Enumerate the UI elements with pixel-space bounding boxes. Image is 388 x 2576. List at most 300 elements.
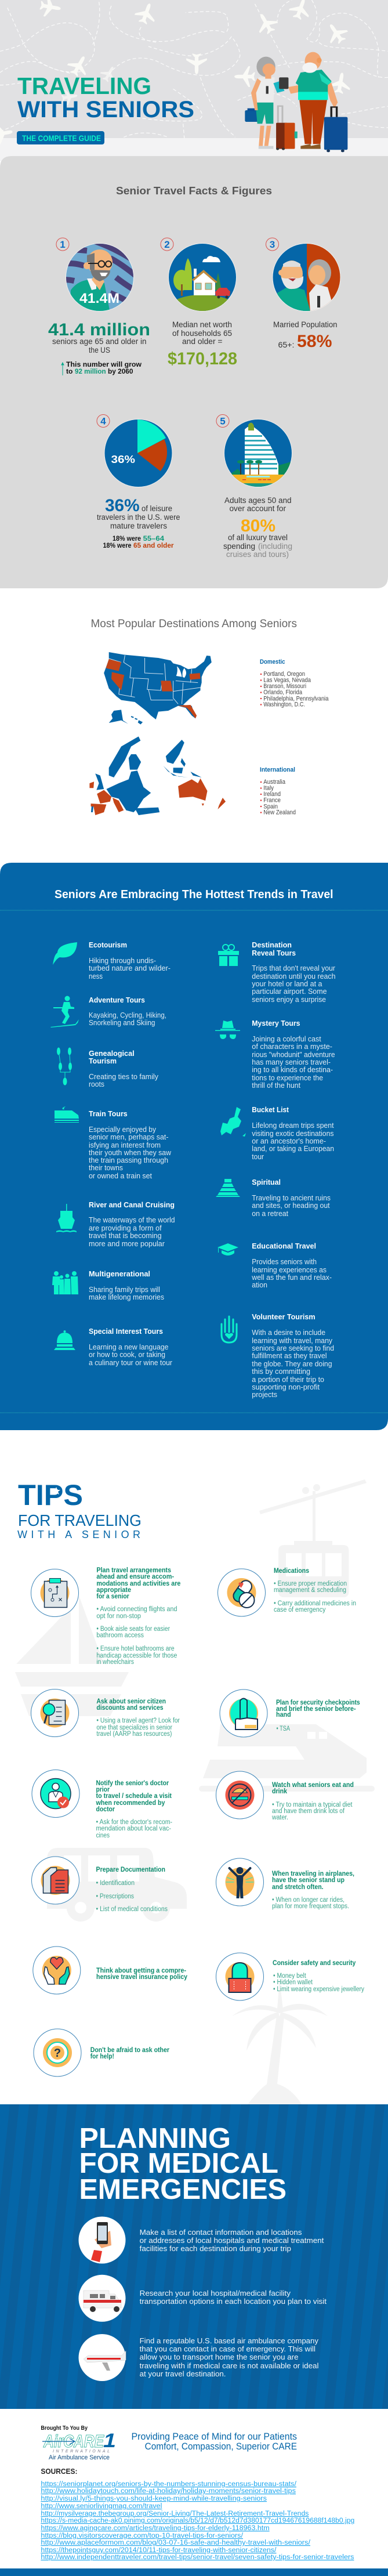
list: international destinations: Spain	[263, 803, 278, 810]
tip: eat and drink: drink	[272, 1788, 288, 1795]
trend: mystery tours: of characters in a myste-	[252, 1042, 332, 1051]
tip: stand and stretch: When traveling in airplanes,	[272, 1871, 354, 1877]
trend: train tours: their towns	[89, 1163, 123, 1172]
trend: mystery tours: rious "whodunit" adventure	[252, 1050, 335, 1059]
tip: notify doctor: mendation about local vac-	[96, 1825, 171, 1832]
fact 4 text: 18% were	[103, 542, 131, 549]
tip: documentation	[96, 1866, 168, 1913]
fact 3 text: 58%	[297, 332, 332, 351]
icon: graduation cap	[217, 1243, 238, 1256]
icon: detective hat and glasses	[215, 1021, 240, 1039]
fact 5 illustration: luxury hotel	[224, 419, 293, 488]
fact 2 badge	[161, 238, 173, 251]
icon: family	[52, 1271, 78, 1294]
trend: volunteer tourism: With a desire to include	[252, 1328, 325, 1337]
logo: AirCare1 International	[42, 2430, 116, 2461]
trend: ecotourism: Hiking through undis-	[89, 956, 156, 965]
trend: destination reveal: Reveal Tours	[252, 949, 296, 957]
tip: security checkpoints: and brief the senior before-	[276, 1706, 356, 1713]
trend: spiritual: and sites, or heading out	[252, 1201, 330, 1210]
trend: volunteer tourism: this by committing	[252, 1367, 310, 1376]
trend: educational travel: well as the fun and relax-	[251, 1273, 332, 1282]
list: domestic destinations: Branson, Missouri	[263, 683, 306, 690]
icon: ship	[56, 1204, 77, 1232]
sources list: http://www.holidaytouch.com/life-at-holiday/holiday-moments/senior-travel-tips	[41, 2488, 296, 2495]
sources list: https://s-media-cache-ak0.pinimg.com/originals/b5/12/d7/b512d7d380177cd19467619688f148b0.jpg	[41, 2517, 354, 2524]
trend: river cruising: travel that is becoming	[89, 1231, 162, 1240]
trend: destination reveal: particular airport. Some	[252, 987, 327, 996]
trend: train tours: the train passing through	[89, 1156, 168, 1164]
trend: spiritual: Spiritual	[252, 1178, 281, 1186]
tip: notify doctor: doctor	[96, 1806, 115, 1813]
heading: tips for traveling with a senior: TIPS	[18, 1479, 83, 1511]
tip icon: travel plan clipboard	[31, 1569, 79, 1616]
watermark: train	[199, 1724, 375, 1792]
tip: safety and security: Consider safety and security	[273, 1960, 356, 1967]
fact 2 text: of households 65	[172, 329, 232, 338]
tip: notify doctor: to travel / schedule a visit	[96, 1793, 172, 1800]
trend: multigenerational: Sharing family trips will	[89, 1285, 160, 1294]
trend: train tours	[89, 1110, 172, 1180]
trend: spiritual: Traveling to ancient ruins	[252, 1193, 331, 1202]
tip: stand and stretch: • When on longer car rides,	[272, 1897, 345, 1904]
fact 5 badge: 5	[220, 415, 226, 427]
tip: notify doctor: • Ask for the doctor's recom-	[96, 1819, 172, 1826]
trend: mystery tours: ing to all kinds of destina-	[252, 1065, 333, 1074]
emergency step 3 text: that you can contact in case of emergency. This will	[140, 2345, 316, 2353]
tip icon: doctor	[32, 1770, 79, 1817]
trend: bucket list: Bucket List	[252, 1106, 289, 1114]
tip: senior discounts: one that specializes in senior	[96, 1724, 172, 1731]
sources list: https://seniorplanet.org/seniors-by-the-numbers-stunning-census-bureau-stats/	[41, 2481, 297, 2488]
sources list: https://blog.visitorscoverage.com/top-10-travel-tips-for-seniors/	[41, 2532, 244, 2539]
fact 1 text	[48, 320, 150, 375]
tip: ask for help: Don't be afraid to ask other	[90, 2047, 169, 2054]
tip: eat and drink: water.	[271, 1814, 288, 1821]
tip: medications	[274, 1568, 356, 1613]
tip: documentation: Prepare Documentation	[96, 1866, 165, 1873]
trend: destination reveal	[252, 941, 336, 1004]
emergency step 2 text: Research your local hospital/medical facility	[140, 2289, 291, 2298]
list: domestic destinations	[260, 659, 329, 708]
emergency step 1 text: or addresses of local hospitals and medical treatment	[140, 2236, 324, 2245]
sources list: https://www.agingcare.com/articles/traveling-tips-for-elderly-118963.htm	[41, 2525, 270, 2532]
tip: documentation: • List of medical conditions	[96, 1906, 168, 1913]
tip: plan arrangements: • Book aisle seats for easier	[96, 1626, 170, 1633]
fact 2 illustration: house and car	[168, 243, 237, 312]
tip: plan arrangements: in wheelchairs	[96, 1659, 134, 1666]
heading: planning for medical emergencies: PLANNING	[79, 2123, 231, 2154]
sources heading: SOURCES:	[41, 2467, 78, 2476]
badge: the complete guide	[17, 131, 104, 144]
fact 1 text: seniors age 65 and older in	[52, 337, 146, 346]
title: TRAVELING	[17, 73, 151, 99]
fact 5 text: over account for	[230, 504, 286, 513]
trend: destination reveal: destination until you reach	[252, 972, 335, 981]
trend: adventure tours: Snorkeling and Skiing	[89, 1018, 155, 1027]
trend: volunteer tourism: projects	[252, 1390, 277, 1399]
icon: phone in hand	[79, 2216, 125, 2264]
trend: train tours: Especially enjoyed by	[89, 1125, 156, 1134]
tip: travel insurance: hensive travel insurance policy	[96, 1974, 188, 1981]
trend: bucket list: visiting exotic destinations	[252, 1129, 334, 1138]
tip icon: stretching person	[216, 1858, 263, 1906]
tip: plan arrangements: for a senior	[96, 1593, 129, 1600]
tip: security checkpoints: • TSA	[276, 1725, 290, 1732]
tip: plan arrangements: modations and activities are	[96, 1580, 180, 1587]
tip: medications: Medications	[274, 1568, 309, 1575]
trend: volunteer tourism	[252, 1313, 334, 1399]
heading: planning for medical emergencies	[79, 2123, 287, 2205]
emergency step 3 text	[140, 2336, 319, 2378]
fact 5 text: 80%	[241, 516, 275, 536]
title	[17, 73, 194, 122]
watermark: palm tree	[232, 1980, 328, 2104]
fact 4 text: mature travelers	[110, 522, 167, 530]
tip: plan arrangements	[96, 1567, 180, 1666]
tip: medications: • Ensure proper medication	[274, 1580, 347, 1587]
panel: hottest trends background	[0, 863, 388, 1430]
fact 4 text: 18% were	[113, 536, 141, 542]
logo: AirCare1 International: INTERNATIONAL	[53, 2450, 110, 2454]
tip icon: medication capsule	[218, 1569, 266, 1616]
icon: air ambulance plane	[79, 2334, 126, 2381]
footer bar	[0, 2568, 388, 2576]
trend: spiritual: on a retreat	[252, 1209, 288, 1218]
logo: AirCare1 International: AirCARE	[43, 2431, 104, 2451]
tip: notify doctor: cines	[96, 1832, 110, 1839]
trend: river cruising: River and Canal Cruising	[89, 1201, 175, 1209]
tip: plan arrangements: bathroom access	[96, 1632, 144, 1639]
trend: special interest tours	[89, 1327, 173, 1367]
tip: stand and stretch: and stretch often.	[272, 1884, 324, 1891]
icon: service bell	[54, 1330, 75, 1350]
trend: train tours: Train Tours	[89, 1110, 128, 1118]
trend: multigenerational: Multigenerational	[89, 1270, 150, 1278]
map: united states	[104, 652, 212, 724]
fact 4 text	[97, 496, 180, 549]
tip: safety and security	[273, 1960, 364, 1993]
trend: genealogical tourism: Tourism	[89, 1057, 117, 1065]
panel: planning for medical emergencies	[0, 2104, 388, 2409]
trend: volunteer tourism: Volunteer Tourism	[252, 1313, 316, 1321]
list: international destinations: Italy	[263, 785, 274, 792]
tip icon: question bubble: ?	[54, 2047, 61, 2060]
icon: train	[55, 1106, 79, 1123]
heading: hottest trends: Seniors Are Embracing The Hottest Trends in Travel	[55, 888, 333, 901]
tip: plan arrangements: • Avoid connecting flights and	[96, 1606, 177, 1613]
heading: most popular destinations: Most Popular Destinations Among Seniors	[90, 618, 297, 630]
trend: adventure tours: Kayaking, Cycling, Hiking,	[89, 1011, 166, 1019]
trend: mystery tours: Mystery Tours	[252, 1019, 300, 1027]
sources list: http://www.aplaceformom.com/blog/03-07-16-safe-and-healthy-travel-with-seniors/	[41, 2539, 311, 2546]
trend: train tours: or owned a train set	[89, 1171, 152, 1180]
list: domestic destinations: Washington, D.C.	[263, 701, 305, 708]
tip icon: documents	[31, 1857, 79, 1904]
tip icon: magnifier and discount form	[31, 1689, 79, 1737]
emergency step 1 text: facilities for each destination during your trip	[140, 2244, 291, 2253]
fact 5 text: of all luxury travel	[228, 533, 288, 542]
fact 4 pie chart	[104, 419, 173, 487]
heading: planning for medical emergencies: FOR MEDICAL	[79, 2148, 278, 2179]
tip icon: hands with heart	[33, 1947, 81, 1994]
fact 1 text: This number will grow	[66, 361, 142, 368]
fact 5 text	[223, 496, 292, 559]
tip: plan arrangements: appropriate	[96, 1587, 131, 1594]
tip: eat and drink: • Try to maintain a typical diet	[272, 1801, 353, 1808]
trend: mystery tours	[252, 1019, 335, 1090]
trend: bucket list: or an ancestor's home-	[252, 1137, 326, 1145]
trend: ecotourism: turbed nature and wilder-	[89, 964, 171, 972]
list: international destinations: New Zealand	[263, 809, 296, 816]
tip: eat and drink: Watch what seniors eat and	[272, 1782, 354, 1789]
trend: train tours: isfying an interest from	[89, 1141, 161, 1149]
trend: bucket list: tour	[252, 1152, 264, 1161]
emergency step 3 text: Find a reputable U.S. based air ambulance company	[140, 2336, 318, 2345]
trend: volunteer tourism: supporting non-profit	[252, 1383, 320, 1391]
tip: stand and stretch: plan for more frequent stops.	[272, 1903, 349, 1910]
fact 5 text: (including	[258, 542, 292, 551]
tip: senior discounts: Ask about senior citizen	[96, 1698, 166, 1705]
fact 1 badge	[56, 238, 69, 251]
list: domestic destinations: Portland, Oregon	[263, 671, 305, 678]
tip: security checkpoints: Plan for security checkpoints	[276, 1699, 360, 1706]
icon: family tree	[57, 1048, 72, 1085]
tip: safety and security: • Money belt	[273, 1973, 306, 1980]
tip: eat and drink: and have them drink lots of	[272, 1808, 345, 1815]
tip icon: security hand	[220, 1689, 267, 1737]
emergency step 2 text: transportation options in each location you plan to visit	[140, 2297, 327, 2306]
tip: notify doctor: prior	[96, 1786, 110, 1793]
list: domestic destinations: Orlando, Florida	[263, 689, 303, 696]
tip: notify doctor	[96, 1780, 172, 1839]
tip: plan arrangements: Plan travel arrangements	[96, 1567, 171, 1574]
emergency step 2 text	[140, 2289, 327, 2306]
watermark: bus	[47, 1848, 187, 1922]
fact 1 badge: 1	[60, 239, 66, 250]
trend: destination reveal: your hotel or land at a	[252, 979, 322, 988]
tip: plan arrangements: • Ensure hotel bathrooms are	[96, 1645, 175, 1652]
list: international destinations: International	[260, 766, 295, 773]
trend: multigenerational	[89, 1270, 164, 1301]
fact 4 text: 65 and older	[133, 542, 174, 549]
tagline: Comfort, Compassion, Superior CARE	[145, 2441, 297, 2452]
emergency step 1 text	[140, 2228, 324, 2253]
trend: destination reveal: Destination	[252, 941, 292, 949]
trend: adventure tours: Adventure Tours	[89, 996, 145, 1004]
trend: educational travel: ation	[252, 1280, 267, 1289]
tip: plan arrangements: handicap accessible for those	[96, 1652, 177, 1659]
trend: train tours: their youth when they saw	[89, 1148, 172, 1157]
fact 1 illustration: man with glasses	[66, 243, 134, 312]
trend: volunteer tourism: learning with travel, many	[252, 1336, 332, 1345]
sources list: http://www.seniorlivingmag.com/travel	[41, 2503, 162, 2510]
sources list: https://thepointsguy.com/2014/10/11-tips-for-traveling-with-senior-citizens/	[41, 2547, 277, 2554]
tip: medications: case of emergency	[274, 1607, 326, 1613]
fact 1 text: 92 million	[75, 368, 106, 375]
tip: medications: • Carry additional medicines in	[274, 1600, 356, 1607]
tip: stand and stretch: have the senior stand up	[272, 1877, 345, 1884]
list: international destinations	[260, 766, 296, 816]
trend: volunteer tourism: a portion of their trip to	[252, 1375, 324, 1384]
fact 3 text	[273, 320, 338, 351]
tip: safety and security: • Hidden wallet	[273, 1979, 313, 1986]
hero background	[0, 0, 388, 161]
fact 1 text: the US	[89, 346, 110, 354]
fact 2 badge: 2	[164, 239, 170, 250]
fact 4 text: 55–64	[143, 536, 165, 542]
trend: genealogical tourism: roots	[89, 1080, 104, 1088]
tip icon: question bubble	[34, 2029, 81, 2076]
trend: ecotourism	[89, 941, 171, 981]
emergency step 3 text: traveling with if medical care is not available or ideal	[140, 2361, 319, 2370]
tagline: Providing Peace of Mind for our Patients	[131, 2431, 297, 2442]
panel: senior travel facts background	[0, 156, 388, 588]
heading: senior travel facts: Senior Travel Facts & Figures	[116, 185, 272, 197]
fact 4 text: 36%	[105, 496, 140, 515]
icon: leaf	[53, 942, 77, 965]
fact 1 text: by 2060	[108, 368, 133, 375]
heading: tips for traveling with a senior: FOR TRAVELING	[18, 1511, 142, 1529]
trend: educational travel: learning experiences as	[252, 1265, 327, 1274]
watermark: sailboat	[15, 1595, 129, 1716]
fact 5 badge	[216, 414, 229, 427]
title: WITH SENIORS	[17, 97, 194, 122]
tip: ask for help: for help!	[90, 2053, 114, 2060]
trend: mystery tours: thrill of the hunt	[252, 1081, 300, 1090]
fact 1 text: 41.4 million	[48, 320, 150, 339]
icon: skier	[50, 996, 79, 1027]
logo: AirCare1 International: Air Ambulance Service	[49, 2454, 110, 2461]
heading: tips for traveling with a senior	[17, 1479, 142, 1540]
icon: gift	[218, 945, 239, 966]
trend: mystery tours: has many seniors travel-	[252, 1058, 331, 1066]
icon: pyramid	[216, 1179, 240, 1197]
emergency step 3 text: at your travel destination.	[140, 2369, 226, 2378]
fact 3 text: Married Population	[273, 320, 338, 329]
trend: bucket list: land, or taking a European	[252, 1144, 334, 1153]
fact 2 text: $170,128	[168, 349, 237, 368]
trend: spiritual	[252, 1178, 331, 1218]
list: international destinations: Australia	[263, 779, 286, 786]
trend: multigenerational: make lifelong memories	[89, 1293, 164, 1301]
trend: ecotourism: Ecotourism	[89, 941, 127, 949]
trend: volunteer tourism: the globe. They are doing	[252, 1359, 332, 1368]
trend: special interest tours: Special Interest Tours	[89, 1327, 163, 1336]
brought to you by: Brought To You By	[41, 2425, 88, 2432]
tip: security checkpoints: hand	[276, 1712, 291, 1718]
illustration: senior couple with luggage	[245, 52, 347, 152]
trend: adventure tours	[89, 996, 166, 1027]
tip: travel insurance: Think about getting a compre-	[96, 1967, 186, 1974]
tip: safety and security: • Limit wearing expensive jewellery	[273, 1986, 364, 1993]
trend: educational travel	[251, 1242, 332, 1289]
trend: destination reveal: Trips that don't reveal your	[252, 964, 336, 972]
fact 2 text: Median net worth	[172, 320, 232, 329]
trend: educational travel: Provides seniors with	[252, 1257, 317, 1266]
stat inside circle: 41.4M	[79, 291, 119, 306]
trend: river cruising: are providing a form of	[89, 1224, 162, 1232]
sources list: http://visual.ly/5-things-you-should-keep-mind-while-travelling-seniors	[41, 2495, 267, 2502]
tip: travel insurance	[96, 1967, 188, 1981]
list: international destinations: Ireland	[263, 791, 281, 798]
trend: destination reveal: seniors enjoy a surprise	[252, 995, 326, 1004]
fact 1 text: to	[66, 368, 72, 375]
sources list: http://www.independenttraveler.com/travel-tips/senior-travel/seven-safety-tips-for-senior-travelers	[41, 2554, 354, 2561]
tip: plan arrangements: opt for non-stop	[96, 1613, 141, 1620]
icon: ambulance	[79, 2275, 125, 2322]
fact 5 text: spending	[223, 542, 255, 551]
badge: the complete guide: THE COMPLETE GUIDE	[22, 133, 101, 143]
emergency step 3 text: allow you to transport home the senior you are	[140, 2353, 298, 2361]
trend: educational travel: Educational Travel	[252, 1242, 316, 1250]
trend: genealogical tourism: Creating ties to family	[89, 1072, 158, 1081]
fact 3 badge	[266, 238, 278, 251]
trend: river cruising: more and more popular	[89, 1239, 165, 1248]
trend: river cruising	[89, 1201, 175, 1248]
fact 3 badge: 3	[270, 239, 275, 250]
tagline	[131, 2431, 297, 2452]
list: domestic destinations: Philadelphia, Pennsylvania	[263, 695, 329, 702]
heading: planning for medical emergencies: EMERGENCIES	[79, 2174, 287, 2205]
fact 3 text: 65+:	[278, 341, 295, 349]
trend: volunteer tourism: seniors are seeking to find	[252, 1344, 334, 1352]
tip: eat and drink	[271, 1782, 354, 1821]
fact 4 pie chart: 36%	[111, 454, 135, 465]
trend: special interest tours: a culinary tour or wine tour	[89, 1358, 173, 1367]
sources list	[41, 2481, 354, 2561]
trend: train tours: senior men, perhaps sat-	[89, 1133, 168, 1141]
tip: documentation: • Identification	[96, 1880, 135, 1887]
tip: notify doctor: when recommended by	[96, 1800, 165, 1807]
trend: river cruising: The waterways of the world	[89, 1215, 175, 1224]
trend: bucket list	[252, 1106, 334, 1161]
trend: genealogical tourism: Genealogical	[89, 1050, 135, 1058]
tip icon: no fast food	[216, 1771, 263, 1819]
tip: documentation: • Prescriptions	[96, 1893, 134, 1900]
trend: genealogical tourism	[89, 1050, 158, 1088]
trend: volunteer tourism: fulfillment as they travel	[252, 1351, 327, 1360]
map: europe, asia and australia	[89, 736, 226, 815]
sources list: http://mysilverage.thebegroup.org/Senior-Living/The-Latest-Retirement-Travel-Trends	[41, 2510, 309, 2517]
emergency step 1 text: Make a list of contact information and locations	[140, 2228, 302, 2237]
fact 4 badge	[97, 414, 110, 427]
fact 4 text: of leisure	[142, 504, 172, 513]
fact 2 text	[168, 320, 237, 368]
trend: bucket list: Lifelong dream trips spent	[252, 1121, 334, 1130]
fact 4 badge: 4	[100, 415, 106, 427]
list: international destinations: France	[263, 797, 281, 804]
tip: security checkpoints	[276, 1699, 360, 1732]
tip: senior discounts: • Using a travel agent? Look for	[96, 1717, 180, 1724]
tip: senior discounts	[96, 1698, 180, 1738]
tip: ask for help	[90, 2047, 169, 2060]
fact 3 illustration: married couple	[273, 243, 341, 313]
tip: plan arrangements: ahead and ensure accom-	[96, 1573, 174, 1580]
tip: senior discounts: travel (AARP has resources)	[96, 1731, 172, 1738]
watermark: cable car	[259, 1479, 367, 1597]
icon: hand with heart	[222, 1316, 237, 1343]
fact 2 text: and older =	[182, 337, 223, 346]
fact 4 text: travelers in the U.S. were	[97, 513, 180, 522]
fact 5 text: cruises and tours)	[226, 550, 289, 559]
trend: mystery tours: tions to experience the	[252, 1073, 323, 1082]
heading: tips for traveling with a senior: WITH A SENIOR	[17, 1529, 140, 1540]
tip icon: padlock	[216, 1953, 263, 2000]
tip: stand and stretch	[272, 1871, 354, 1910]
trend: ecotourism: ness	[89, 972, 103, 981]
trend: special interest tours: or how to cook, or taking	[89, 1350, 165, 1359]
